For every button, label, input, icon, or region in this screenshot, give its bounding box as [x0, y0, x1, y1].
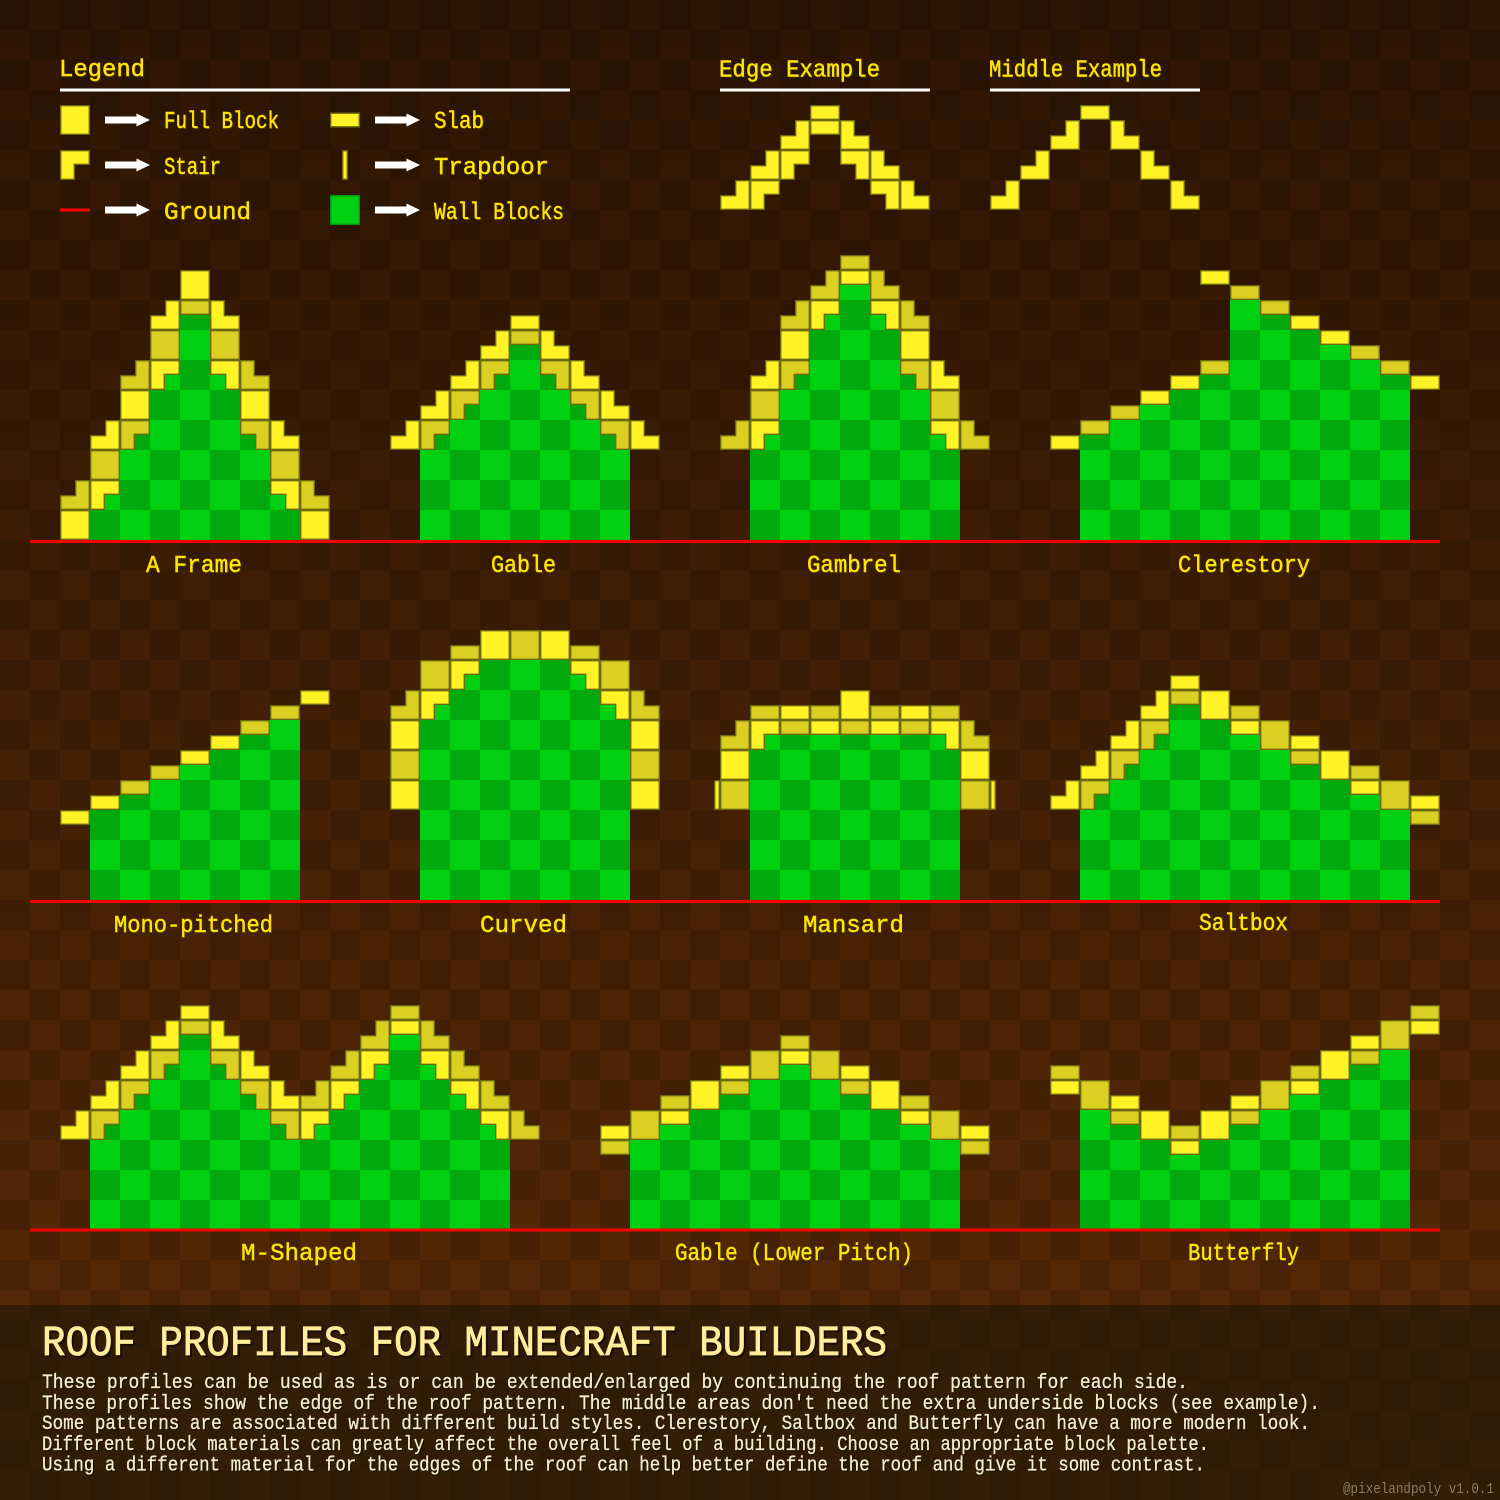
icon: wall block: [331, 196, 359, 224]
legend item: full block: [61, 106, 279, 136]
label: Slab: [434, 109, 484, 136]
heading: middle example: Middle Example: [989, 58, 1162, 84]
ground line: row 1: [30, 540, 1440, 543]
label: Gable: [491, 553, 556, 580]
roof blocks: [391, 316, 659, 449]
label: Clerestory: [1178, 553, 1310, 580]
legend underline: [60, 88, 570, 92]
icon: slab: [331, 113, 359, 127]
icon: ground line: [60, 208, 90, 212]
arrow: [375, 204, 420, 216]
description text: These profiles show the edge of the roof pattern. The middle areas don't need the extra underside blocks (see example).: [42, 1393, 1320, 1416]
description text: Some patterns are associated with different build styles. Clerestory, Saltbox and Butterfly can have a more modern look.: [42, 1413, 1310, 1436]
edge example underline: [720, 88, 930, 92]
middle example underline: [990, 88, 1200, 92]
profile: Clerestory: [1051, 271, 1439, 580]
label: Saltbox: [1199, 911, 1288, 938]
arrow: [105, 114, 150, 126]
profile: Mansard: [715, 691, 995, 940]
roof blocks: [721, 256, 989, 449]
icon: trapdoor: [343, 151, 347, 179]
panel: edge example: [719, 58, 930, 209]
label: Mono-pitched: [114, 913, 273, 940]
roof blocks: [601, 1036, 989, 1154]
label: A Frame: [146, 553, 242, 580]
profile: Curved: [391, 631, 659, 940]
legend item: wall blocks: [331, 196, 564, 227]
wall blocks: [420, 345, 630, 540]
arrow: [375, 114, 420, 126]
legend item: slab: [331, 109, 484, 136]
wall blocks: [1080, 1050, 1410, 1230]
middle example roof blocks: [991, 106, 1199, 209]
label: Curved: [480, 913, 567, 940]
wall blocks: [90, 315, 300, 540]
wall blocks: [1080, 705, 1410, 900]
legend item: trapdoor: [343, 151, 549, 182]
heading: legend: Legend: [59, 57, 145, 84]
footer background: [0, 1305, 1500, 1500]
arrow: [105, 158, 150, 172]
roof blocks: [61, 1006, 539, 1139]
legend item: ground: [60, 200, 251, 227]
arrow: [105, 204, 150, 216]
wall blocks: [750, 285, 960, 540]
label: Ground: [164, 200, 251, 227]
roof blocks: [61, 691, 329, 824]
heading: edge example: Edge Example: [719, 58, 880, 84]
title: ROOF PROFILES FOR MINECRAFT BUILDERS: [42, 1319, 887, 1368]
arrow: [375, 158, 420, 172]
label: Butterfly: [1188, 1241, 1299, 1268]
label: Full Block: [164, 109, 279, 136]
wall blocks: [750, 735, 960, 900]
profile: M-Shaped: [61, 1006, 539, 1268]
roof blocks: [1051, 676, 1439, 824]
icon: stair: [61, 151, 89, 179]
label: Gable (Lower Pitch): [675, 1241, 913, 1268]
wall blocks: [90, 720, 300, 900]
legend item: stair: [61, 151, 221, 182]
ground line: row 2: [30, 900, 1440, 903]
roof blocks: [715, 691, 995, 809]
profile: Gable (Lower Pitch): [601, 1036, 989, 1268]
profile: Gable: [391, 316, 659, 580]
label: Wall Blocks: [434, 200, 564, 227]
roof blocks: [391, 631, 659, 809]
panel: footer: [0, 1305, 1500, 1500]
label: M-Shaped: [241, 1241, 357, 1268]
profile: Saltbox: [1051, 676, 1439, 938]
roof blocks: [1051, 1006, 1439, 1154]
edge example roof blocks: [721, 106, 929, 209]
label: Stair: [164, 155, 221, 182]
profile: Mono-pitched: [61, 691, 329, 940]
wall blocks: [630, 1065, 960, 1230]
profile: Gambrel: [721, 256, 989, 580]
label: Gambrel: [807, 553, 901, 580]
roof blocks: [61, 271, 329, 539]
ground line: row 3: [30, 1228, 1440, 1232]
description text: [42, 1372, 1320, 1478]
panel: middle example: [989, 58, 1200, 209]
wall blocks: [420, 660, 630, 900]
wall blocks: [90, 1035, 510, 1230]
profile: Butterfly: [1051, 1006, 1439, 1268]
description text: These profiles can be used as is or can be extended/enlarged by continuing the roof pattern for each side.: [42, 1372, 1188, 1395]
label: Trapdoor: [434, 155, 549, 182]
roof blocks: [1051, 271, 1439, 449]
profile: A Frame: [61, 271, 329, 580]
panel: legend: [59, 57, 570, 227]
wall blocks: [1080, 300, 1410, 540]
label: Mansard: [803, 913, 904, 940]
description text: Using a different material for the edges of the roof can help better define the roof and give it some contrast.: [42, 1454, 1205, 1478]
description text: Different block materials can greatly affect the overall feel of a building. Choose an appropriate block palette.: [42, 1434, 1209, 1457]
icon: full block: [61, 106, 89, 134]
